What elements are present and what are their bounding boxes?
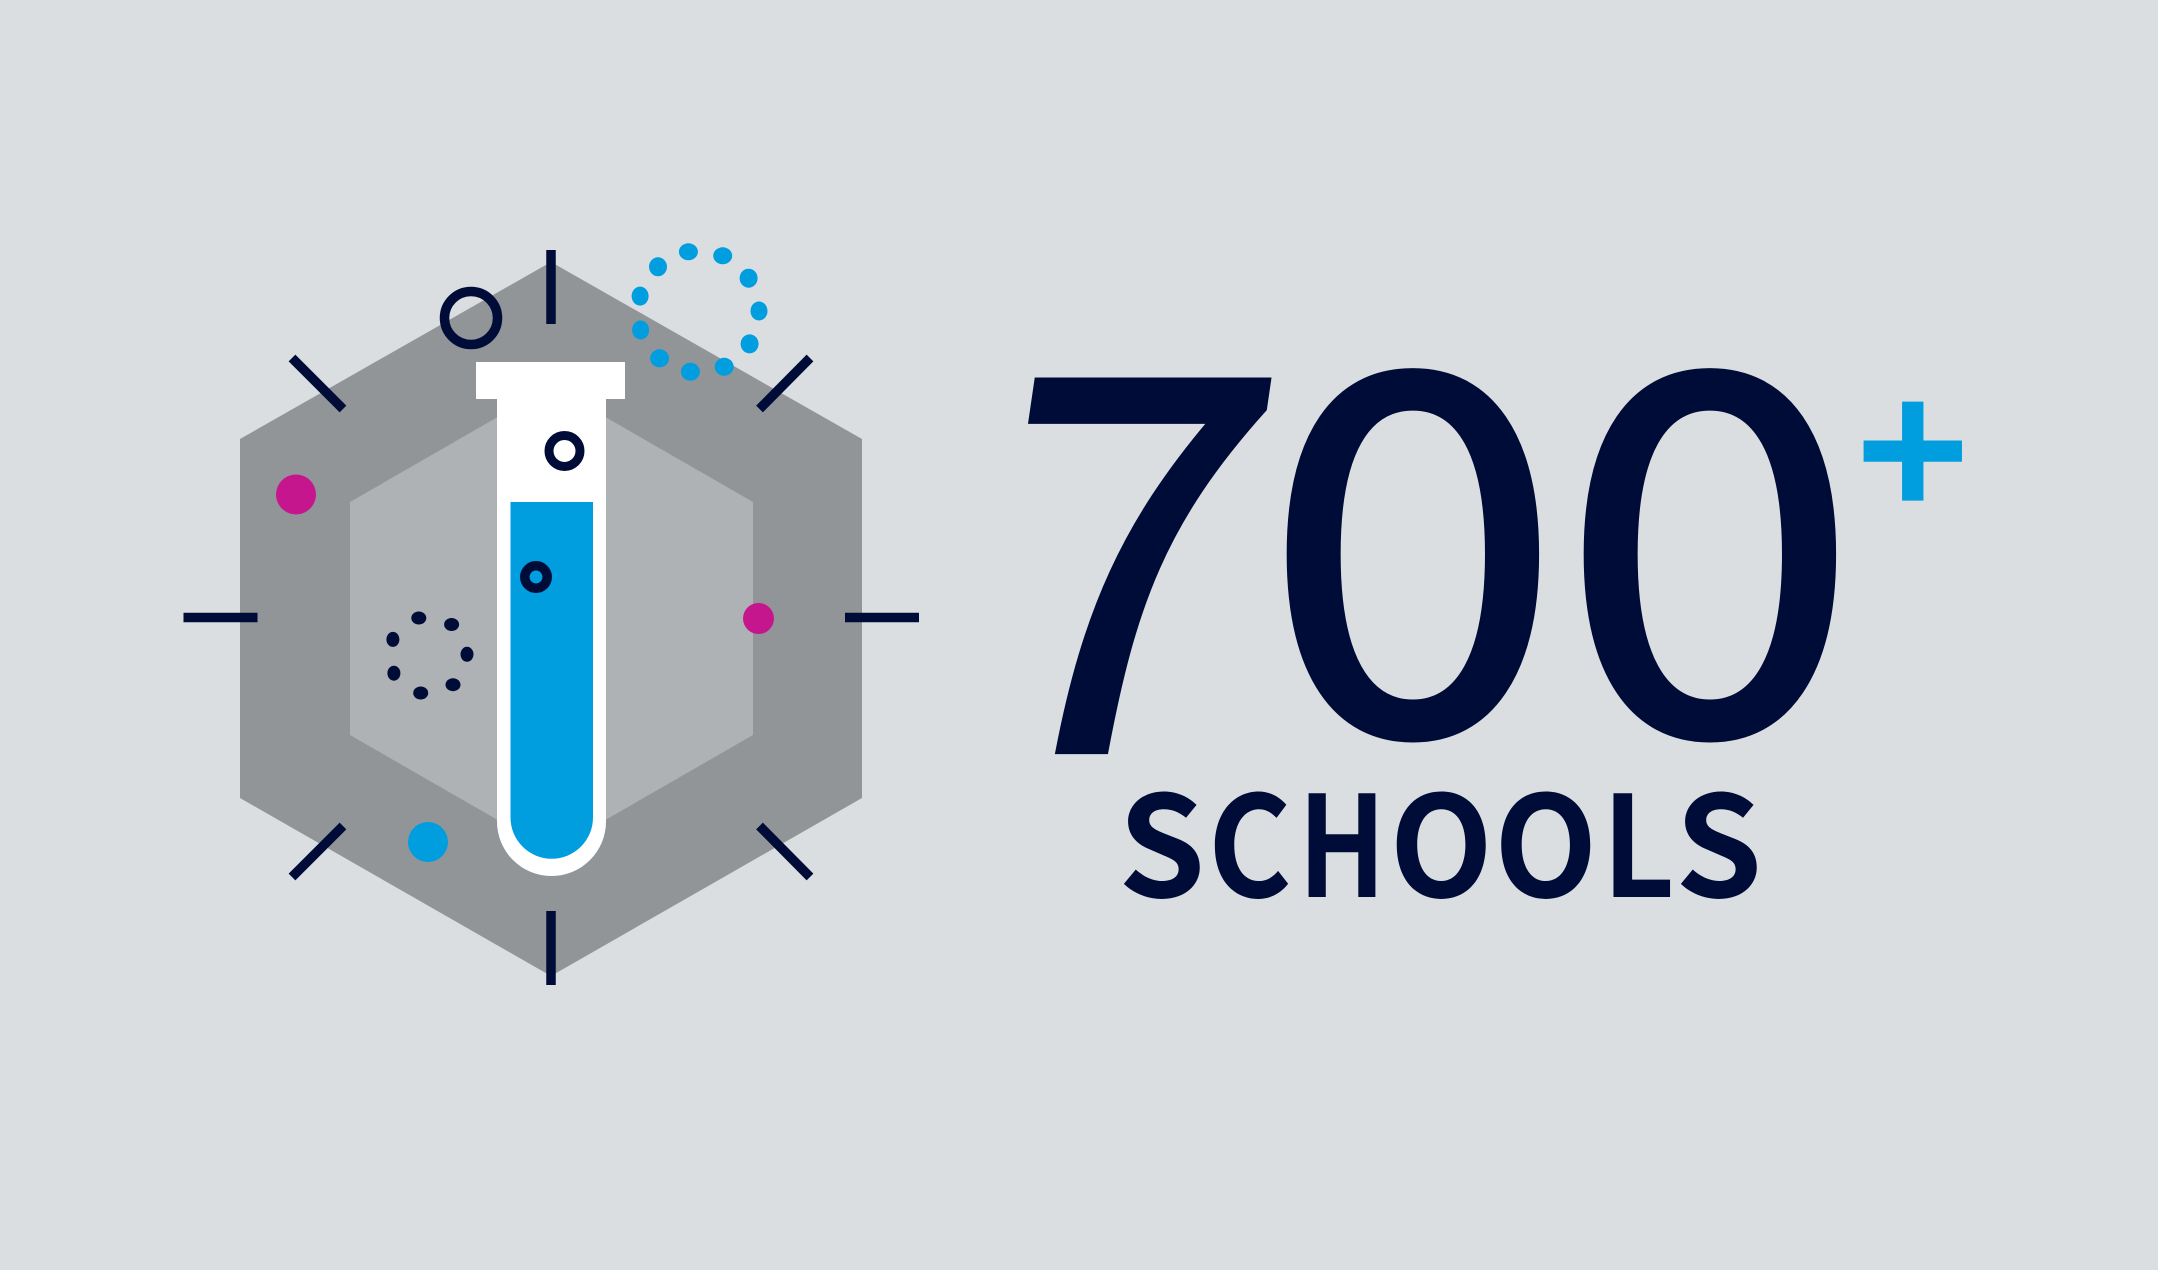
label: SCHOOLS	[1118, 735, 1762, 938]
plus sign: +	[1858, 346, 1967, 553]
label: SCHOOLS: H	[1298, 736, 1386, 938]
inner hexagon	[350, 386, 753, 851]
label: SCHOOLS: S	[1118, 736, 1205, 938]
label: SCHOOLS: L	[1602, 736, 1675, 938]
tube liquid	[510, 502, 593, 859]
digit 0: 0	[1263, 156, 1562, 877]
radial tick marks	[184, 250, 919, 985]
navy dotted circle	[386, 612, 474, 700]
label: SCHOOLS: O	[1494, 735, 1597, 938]
outer hexagon	[240, 262, 862, 976]
ring on white	[549, 436, 580, 466]
large navy ring	[444, 292, 498, 344]
number: 700+	[936, 147, 1967, 902]
ring in liquid	[525, 566, 547, 588]
digit 7: 7	[936, 147, 1326, 902]
test tube	[476, 362, 625, 876]
tube glass	[476, 362, 625, 876]
label: SCHOOLS: C	[1208, 735, 1292, 938]
digit 0: 0	[1560, 156, 1859, 877]
label: SCHOOLS: S	[1675, 736, 1762, 938]
icon: hexagon with test tube	[184, 243, 919, 985]
magenta dot right	[743, 603, 774, 634]
blue dot	[408, 822, 448, 862]
blue dotted circle	[632, 243, 768, 381]
label: SCHOOLS: O	[1390, 735, 1493, 938]
magenta dot left	[276, 474, 316, 514]
